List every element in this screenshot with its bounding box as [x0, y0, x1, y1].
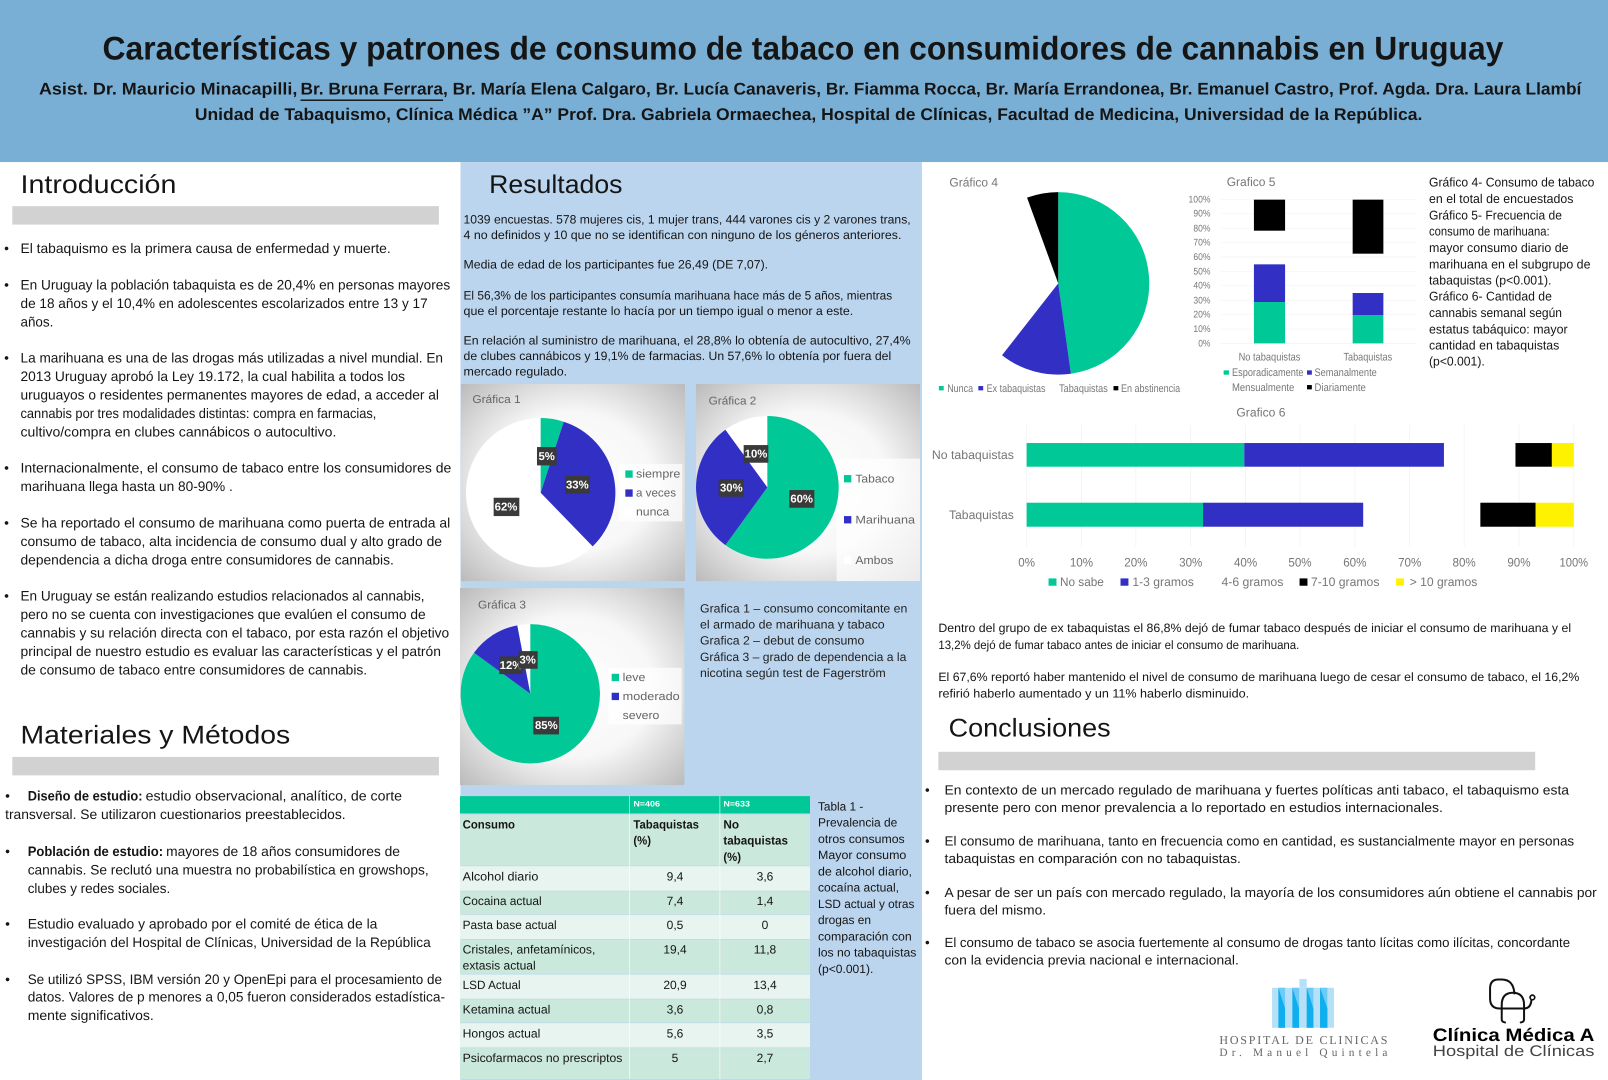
text block: conclusions bullets: presente pero con menor prevalencia a lo reportado en estudios internacionales. [944, 799, 1443, 815]
chart: gráfico 6 horizontal stacked bars [932, 406, 1588, 589]
table: prevalencia de otros consumos: (%) [633, 834, 651, 847]
caption: tabla 1: LSD actual y otras [818, 897, 914, 911]
table: prevalencia de otros consumos: Cocaina actual [463, 894, 542, 908]
text block: introduction bullets: marihuana llega hasta un 80-90% . [21, 478, 233, 494]
text block: conclusions bullets [925, 782, 1597, 968]
chart: gráfico 4 pie: Gráfico 4 [949, 176, 998, 189]
caption: gráficos 4 to 6: tabaquistas (p<0.001). [1429, 274, 1551, 288]
table: prevalencia de otros consumos: 0,8 [757, 1002, 773, 1016]
text block: conclusions bullets: • [925, 885, 930, 900]
text block: conclusions bullets: • [925, 935, 930, 950]
chart: gráfico 5 stacked bars: Semanalmente [1314, 366, 1377, 379]
text block: methods bullets: clubes y redes sociales. [28, 881, 170, 896]
table: prevalencia de otros consumos: No [723, 817, 739, 831]
text block: results summary: Media de edad de los participantes fue 26,49 (DE 7,07). [464, 257, 768, 272]
table: prevalencia de otros consumos: 20,9 [663, 978, 687, 992]
table: prevalencia de otros consumos: tabaquistas [723, 834, 788, 847]
caption: gráficas 1 to 3: Gráfica 3 – grado de dependencia a la [700, 650, 907, 664]
table: prevalencia de otros consumos: Psicofarmacos no prescriptos [463, 1051, 622, 1065]
text block: introduction bullets: uruguayos o residentes permanentes mayores de edad, a acceder al [21, 387, 439, 403]
chart: gráfico 5 stacked bars: 30% [1193, 295, 1210, 306]
text block: introduction bullets: En Uruguay se están realizando estudios relacionados al cannabis, [21, 588, 425, 604]
text block: conclusions bullets: con la evidencia previa nacional e internacional. [944, 952, 1239, 968]
logo: clínica médica a: Hospital de Clínicas [1433, 1042, 1594, 1059]
panel: materiales y métodos [5, 721, 445, 1023]
chart: gráfica 1 pie [461, 384, 685, 581]
chart: gráfico 6 horizontal stacked bars: 70% [1398, 556, 1421, 569]
table: prevalencia de otros consumos: Alcohol diario [463, 869, 538, 883]
logo: hospital de clínicas [1219, 979, 1387, 1059]
text block: methods bullets: datos. Valores de p menores a 0,05 fueron considerados estadística- [28, 989, 445, 1005]
text block: introduction bullets: En Uruguay la población tabaquista es de 20,4% en personas mayores [21, 277, 451, 293]
authors: Asist. Dr. Mauricio Minacapilli, [39, 80, 297, 98]
chart: gráfico 5 stacked bars: Grafico 5 [1227, 175, 1275, 189]
text block: results summary: En relación al suministro de marihuana, el 28,8% lo obtenía de autocultivo, 27,4% [464, 333, 911, 348]
caption: gráficos 4 to 6 [1429, 176, 1594, 369]
table: prevalencia de otros consumos: 5 [672, 1051, 678, 1065]
text block: conclusions bullets: El consumo de tabaco se asocia fuertemente al consumo de drogas tanto lícitas como ilícitas, concordante [944, 935, 1570, 950]
chart: gráfico 6 horizontal stacked bars: 60% [1343, 556, 1366, 569]
text block: results summary: 4 no definidos y 10 que no se identifican con ninguno de los géneros anteriores. [464, 228, 901, 242]
text block: ex tabaquistas results: El 67,6% reportó haber mantenido el nivel de consumo de marihuana luego de cesar el consumo de tabaco, el 16,2% [938, 670, 1580, 684]
caption: tabla 1: comparación con [818, 929, 912, 943]
text block: introduction bullets: Internacionalmente, el consumo de tabaco entre los consumidores de [21, 460, 451, 475]
text block: results summary [464, 212, 911, 378]
chart: gráfica 3 pie: 12% [500, 659, 522, 671]
text block: results summary: 1039 encuestas. 578 mujeres cis, 1 mujer trans, 444 varones cis y 2 varones trans, [464, 212, 911, 227]
chart: gráfico 4 pie: Ex tabaquistas [987, 382, 1045, 394]
text block: methods bullets: • [5, 972, 10, 987]
table: prevalencia de otros consumos [460, 796, 810, 1079]
caption: tabla 1: cocaína actual, [818, 881, 899, 894]
table: prevalencia de otros consumos: 0,5 [667, 918, 683, 932]
table: prevalencia de otros consumos: 19,4 [663, 942, 687, 956]
caption: gráficos 4 to 6: (p<0.001). [1429, 355, 1485, 369]
chart: gráfico 5 stacked bars: 0% [1198, 338, 1210, 349]
icon: stethoscope [1490, 979, 1535, 1022]
text block: introduction bullets: • [4, 277, 9, 293]
chart: gráfica 2 pie: Ambos [855, 554, 893, 567]
chart: gráfico 6 horizontal stacked bars: 1-3 gramos [1132, 575, 1194, 589]
caption: gráficas 1 to 3 [700, 601, 907, 680]
caption: tabla 1: Mayor consumo [818, 848, 906, 862]
table: prevalencia de otros consumos: N=633 [723, 799, 750, 808]
table: prevalencia de otros consumos: 3,6 [667, 1002, 683, 1016]
caption: gráficos 4 to 6: cantidad en tabaquistas [1429, 339, 1559, 353]
text block: introduction bullets: La marihuana es una de las drogas más utilizadas a nivel mundial. En [21, 350, 443, 366]
text block: introduction bullets: Se ha reportado el consumo de marihuana como puerta de entrada al [21, 515, 450, 531]
logo: clínica médica a: Clínica Médica A [1433, 1025, 1594, 1045]
caption: gráficas 1 to 3: nicotina según test de Fagerström [700, 666, 886, 680]
caption: gráficos 4 to 6: cannabis semanal según [1429, 306, 1562, 320]
table: prevalencia de otros consumos: extasis actual [463, 959, 536, 972]
chart: gráfico 4 pie: Tabaquistas [1059, 382, 1108, 394]
table: prevalencia de otros consumos: Consumo [463, 817, 515, 831]
panel: resultados [460, 162, 922, 1080]
table: prevalencia de otros consumos: 7,4 [667, 894, 683, 908]
affiliation: Unidad de Tabaquismo, Clínica Médica ”A” Prof. Dra. Gabriela Ormaechea, Hospital de Clínicas, Facultad de Medicina, Universidad de la República. [195, 106, 1422, 124]
chart: gráfico 5 stacked bars [1189, 175, 1417, 393]
table: prevalencia de otros consumos: 5,6 [667, 1027, 683, 1040]
text block: methods bullets: transversal. Se utilizaron cuestionarios preestablecidos. [5, 807, 346, 822]
chart: gráfico 6 horizontal stacked bars: 50% [1288, 556, 1312, 569]
table: prevalencia de otros consumos: 11,8 [754, 942, 776, 956]
chart: gráfico 6 horizontal stacked bars: 10% [1070, 556, 1093, 569]
chart: gráfico 5 stacked bars: 40% [1193, 280, 1210, 291]
chart: gráfico 6 horizontal stacked bars: Grafico 6 [1236, 406, 1286, 419]
chart: gráfico 5 stacked bars: No tabaquistas [1239, 351, 1300, 363]
chart: gráfico 5 stacked bars: 80% [1193, 223, 1210, 234]
chart: gráfico 6 horizontal stacked bars: No sabe [1060, 575, 1104, 589]
chart: gráfico 6 horizontal stacked bars: Tabaquistas [949, 508, 1014, 522]
text block: introduction bullets: consumo de tabaco, alta incidencia de consumo dual y alto grado de [21, 534, 442, 549]
chart: gráfica 2 pie: 10% [745, 447, 767, 460]
table: prevalencia de otros consumos: 0 [762, 918, 768, 932]
caption: gráficos 4 to 6: Gráfico 6- Cantidad de [1429, 290, 1552, 304]
text block: introduction bullets: cannabis y su relación directa con el tabaco, por esta razón el objetivo [21, 625, 449, 641]
chart: gráfica 1 pie: 62% [495, 501, 517, 513]
text block: results summary: que el porcentaje restante lo hacía por un tiempo igual o menor a este. [464, 304, 853, 318]
text block: methods bullets: • [5, 788, 10, 804]
chart: gráfico 6 horizontal stacked bars: > 10 gramos [1410, 575, 1477, 589]
chart: gráfica 1 pie: nunca [636, 506, 669, 518]
chart: gráfica 2 pie: 30% [720, 481, 743, 494]
heading: introducción: Introducción [21, 170, 176, 199]
caption: tabla 1: los no tabaquistas [818, 946, 916, 959]
text block: methods bullets: mayores de 18 años consumidores de [166, 844, 400, 859]
text block: introduction bullets: 2013 Uruguay aprobó la Ley 19.172, la cual habilita a todos los [21, 369, 405, 384]
table: prevalencia de otros consumos: LSD Actual [463, 978, 521, 992]
header banner [0, 0, 1608, 162]
text block: introduction bullets: cannabis por tres modalidades distintas: compra en farmacias, [21, 406, 376, 421]
table: prevalencia de otros consumos: (%) [723, 850, 741, 864]
chart: gráfica 2 pie [696, 384, 920, 581]
chart: gráfico 5 stacked bars: Mensualmente [1232, 381, 1294, 393]
chart: gráfica 1 pie: siempre [636, 468, 680, 480]
text block: methods bullets: estudio observacional, analítico, de corte [146, 788, 402, 804]
chart: gráfico 5 stacked bars: 20% [1193, 309, 1210, 320]
logo: clínica médica a [1433, 979, 1594, 1059]
chart: gráfica 1 pie: a veces [636, 487, 676, 499]
chart group: gráficas 1 to 3 [460, 384, 920, 785]
text block: results summary: de clubes cannábicos y 19,1% de farmacias. Un 57,6% lo obtenía por fuera del [464, 349, 891, 363]
text block: results summary: El 56,3% de los participantes consumía marihuana hace más de 5 años, mientras [464, 288, 892, 303]
text block: introduction bullets: • [4, 460, 9, 475]
chart: gráfica 1 pie: Gráfica 1 [472, 393, 521, 406]
text block: ex tabaquistas results: 13,2% dejó de fumar tabaco antes de iniciar el consumo de marihuana. [938, 638, 1299, 652]
panel: conclusiones [925, 714, 1597, 968]
caption: gráficas 1 to 3: Grafica 2 – debut de consumo [700, 634, 864, 647]
chart: gráfica 2 pie: 60% [790, 492, 813, 505]
authors: , Br. María Elena Calgaro, Br. Lucía Canaveris, Br. Fiamma Rocca, Br. María Errandonea, Br. Emanuel Castro, Prof. Agda. Dra. Laura Llambí [443, 80, 1583, 98]
caption: gráficas 1 to 3: el armado de marihuana y tabaco [700, 617, 885, 631]
chart: gráfico 5 stacked bars: 60% [1193, 252, 1210, 262]
text block: methods bullets: mente significativos. [28, 1008, 154, 1023]
caption: tabla 1: drogas en [818, 913, 871, 927]
chart: gráfico 4 pie [939, 176, 1180, 394]
text block: introduction bullets [4, 241, 451, 677]
table: prevalencia de otros consumos: N=406 [633, 799, 660, 808]
chart: gráfica 1 pie: 5% [538, 450, 555, 463]
table: prevalencia de otros consumos: 1,4 [757, 894, 773, 908]
text block: methods bullets: Se utilizó SPSS, IBM versión 20 y OpenEpi para el procesamiento de [28, 972, 442, 987]
text block: conclusions bullets: tabaquistas en comparación con no tabaquistas. [944, 851, 1241, 866]
chart: gráfico 6 horizontal stacked bars: No tabaquistas [932, 448, 1014, 462]
chart: gráfica 2 pie: Gráfica 2 [709, 395, 756, 407]
authors: Br. Bruna Ferrara [300, 80, 444, 98]
text block: results summary: mercado regulado. [464, 364, 567, 378]
panel: introducción [4, 170, 451, 677]
text block: methods bullets: Diseño de estudio: [28, 788, 143, 804]
chart: gráfica 3 pie: severo [623, 709, 659, 722]
heading: conclusiones: Conclusiones [949, 714, 1111, 743]
text block: methods bullets: Población de estudio: [28, 844, 163, 859]
caption: tabla 1: (p<0.001). [818, 962, 873, 976]
caption: tabla 1 [818, 799, 916, 976]
chart: gráfica 3 pie [460, 588, 684, 785]
text block: conclusions bullets: En contexto de un mercado regulado de marihuana y fuertes políticas anti tabaco, el tabaquismo esta [944, 782, 1570, 797]
text block: introduction bullets: cultivo/compra en clubes cannábicos o autocultivo. [21, 424, 336, 439]
text block: introduction bullets: años. [21, 314, 53, 330]
logo: hospital de clínicas: HOSPITAL DE CLINICAS [1219, 1033, 1387, 1047]
text block: introduction bullets: • [4, 588, 9, 604]
text block: ex tabaquistas results [938, 621, 1580, 701]
caption: tabla 1: de alcohol diario, [818, 864, 912, 878]
chart: gráfica 2 pie: Tabaco [855, 472, 894, 485]
chart: gráfica 3 pie: 3% [519, 653, 536, 666]
chart: gráfico 6 horizontal stacked bars: 4-6 gramos [1221, 575, 1283, 589]
chart: gráfica 1 pie: 33% [566, 478, 589, 491]
text block: ex tabaquistas results: Dentro del grupo de ex tabaquistas el 86,8% dejó de fumar tabaco después de iniciar el consumo de marihuana y el [938, 621, 1571, 635]
chart: gráfico 5 stacked bars: 70% [1193, 237, 1210, 248]
text block: ex tabaquistas results: refirió haberlo aumentado y un 11% haberlo disminuido. [938, 686, 1249, 701]
text block: introduction bullets: El tabaquismo es la primera causa de enfermedad y muerte. [21, 241, 391, 256]
chart: gráfica 3 pie: leve [623, 671, 645, 684]
chart: gráfico 6 horizontal stacked bars: 90% [1507, 556, 1531, 569]
chart: gráfico 5 stacked bars: 10% [1193, 324, 1210, 334]
table: prevalencia de otros consumos: Hongos actual [463, 1027, 540, 1040]
chart: gráfico 6 horizontal stacked bars: 7-10 gramos [1311, 575, 1379, 589]
chart: gráfica 3 pie: moderado [623, 690, 680, 703]
caption: tabla 1: otros consumos [818, 832, 905, 846]
table: prevalencia de otros consumos: 13,4 [753, 978, 777, 992]
chart: gráfico 5 stacked bars: Tabaquistas [1343, 351, 1392, 363]
text block: introduction bullets: de 18 años y el 10,4% en adolescentes escolarizados entre 13 y 17 [21, 296, 428, 311]
text block: introduction bullets: pero no se cuenta con investigaciones que evalúen el consumo de [21, 607, 426, 622]
chart: gráfico 6 horizontal stacked bars: 40% [1234, 556, 1257, 569]
table: prevalencia de otros consumos: Pasta base actual [463, 918, 557, 932]
chart: gráfico 6 horizontal stacked bars: 20% [1124, 556, 1148, 569]
table: prevalencia de otros consumos: 9,4 [667, 869, 683, 883]
heading: materiales y métodos: Materiales y Métodos [21, 721, 290, 750]
caption: tabla 1: Prevalencia de [818, 816, 897, 829]
text block: methods bullets: Estudio evaluado y aprobado por el comité de ética de la [28, 916, 378, 932]
text block: methods bullets: cannabis. Se reclutó una muestra no probabilística en growshops, [28, 862, 429, 877]
chart: gráfico 5 stacked bars: Diariamente [1314, 381, 1366, 393]
chart: gráfico 5 stacked bars: Esporadicamente [1232, 366, 1304, 379]
text block: methods bullets: • [5, 844, 10, 859]
chart: gráfico 4 pie: Nunca [947, 382, 973, 394]
caption: gráficos 4 to 6: consumo de marihuana: [1429, 225, 1550, 239]
text block: introduction bullets: dependencia a dicha droga entre consumidores de cannabis. [21, 552, 394, 568]
heading: resultados: Resultados [489, 170, 622, 199]
text block: conclusions bullets: El consumo de marihuana, tanto en frecuencia como en cantidad, es sustancialmente mayor en personas [944, 833, 1575, 849]
chart: gráfico 5 stacked bars: 100% [1189, 194, 1210, 205]
caption: tabla 1: Tabla 1 - [818, 799, 863, 813]
chart: gráfico 6 horizontal stacked bars: 80% [1452, 556, 1476, 569]
table: prevalencia de otros consumos: 2,7 [757, 1051, 773, 1065]
text block: introduction bullets: • [4, 515, 9, 531]
chart: gráfico 5 stacked bars: 90% [1193, 208, 1210, 219]
text block: conclusions bullets: • [925, 782, 930, 797]
text block: introduction bullets: principal de nuestro estudio es evaluar las características y el patrón [21, 644, 441, 659]
caption: gráficos 4 to 6: Gráfico 5- Frecuencia de [1429, 208, 1562, 222]
text block: methods bullets [5, 788, 445, 1023]
text block: conclusions bullets: fuera del mismo. [944, 902, 1046, 917]
text block: introduction bullets: de consumo de tabaco entre consumidores de cannabis. [21, 662, 367, 677]
logo: hospital de clínicas: Dr. Manuel Quintela [1219, 1046, 1387, 1059]
chart: gráfico 5 stacked bars: 50% [1193, 266, 1210, 277]
chart: gráfico 6 horizontal stacked bars: 100% [1560, 556, 1588, 569]
chart: gráfico 6 horizontal stacked bars: 30% [1179, 556, 1202, 569]
chart: gráfico 6 horizontal stacked bars: 0% [1018, 556, 1035, 569]
table: prevalencia de otros consumos: Ketamina actual [463, 1002, 550, 1016]
text block: methods bullets: investigación del Hospital de Clínicas, Universidad de la República [28, 935, 431, 950]
text block: conclusions bullets: • [925, 833, 930, 849]
text block: conclusions bullets: A pesar de ser un país con mercado regulado, la mayoría de los consumidores aún obtiene el cannabis por [944, 885, 1597, 900]
chart: gráfica 3 pie: Gráfica 3 [478, 598, 526, 611]
text block: introduction bullets: • [4, 241, 9, 256]
chart: gráfica 2 pie: Marihuana [855, 513, 915, 526]
table: prevalencia de otros consumos: Tabaquistas [633, 817, 699, 831]
table: prevalencia de otros consumos: Cristales, anfetamínicos, [463, 942, 595, 956]
text block: introduction bullets: • [4, 350, 9, 366]
chart: gráfica 3 pie: 85% [535, 719, 558, 732]
table: prevalencia de otros consumos: 3,6 [757, 869, 773, 883]
table: prevalencia de otros consumos: 3,5 [757, 1027, 773, 1040]
caption: gráficas 1 to 3: Grafica 1 – consumo concomitante en [700, 601, 907, 615]
text block: methods bullets: • [5, 916, 10, 932]
chart: gráfico 4 pie: En abstinencia [1121, 382, 1180, 394]
title: Características y patrones de consumo de tabaco en consumidores de cannabis en Uruguay [103, 30, 1504, 67]
authors [39, 80, 1583, 101]
